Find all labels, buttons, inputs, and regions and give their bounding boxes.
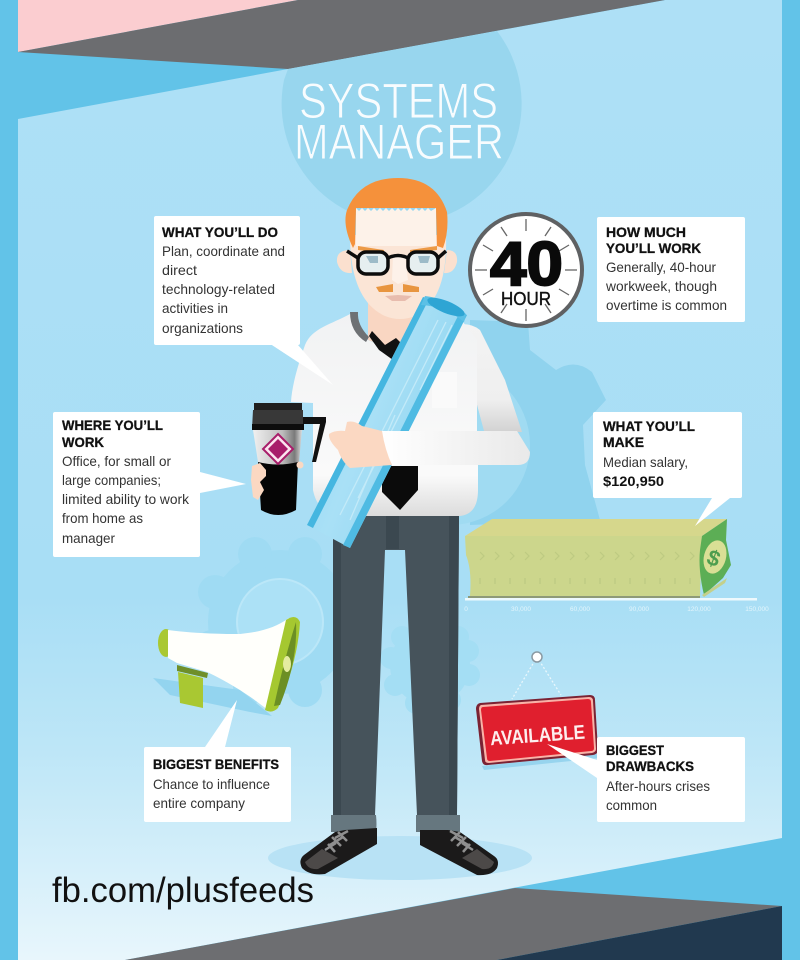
collar — [369, 331, 404, 360]
title circle — [282, 31, 522, 224]
hair — [345, 178, 448, 248]
eyebrows — [358, 246, 437, 253]
icon: available sign — [476, 652, 600, 770]
eyes — [366, 256, 430, 263]
callout: where you'll work: Office, for small or — [62, 453, 171, 469]
person — [291, 178, 530, 875]
rolled tube — [307, 294, 467, 548]
chart: money stack salary: 60,000 — [570, 606, 590, 613]
trouser cuffs — [331, 815, 460, 832]
title: SYSTEMS — [299, 73, 498, 129]
callout: biggest benefits: Chance to influence — [153, 776, 270, 792]
icon: megaphone — [153, 617, 300, 716]
icon: travel mug — [251, 403, 326, 515]
callout: what you'll make: $120,950 — [603, 473, 664, 489]
callout: how much you'll work: HOW MUCH — [606, 224, 686, 240]
callout: what you'll make — [593, 412, 742, 526]
lips — [385, 295, 412, 301]
shirt torso — [291, 313, 478, 516]
callout: biggest benefits — [144, 700, 291, 822]
tie — [382, 466, 418, 510]
chart: money stack salary: 90,000 — [629, 606, 649, 613]
pocket — [432, 372, 457, 408]
grey top band — [18, 0, 665, 69]
gears backdrop — [195, 320, 606, 714]
banknote end: $ — [704, 544, 724, 572]
callout: where you'll work: manager — [62, 530, 115, 546]
callout: what you'll make: WHAT YOU’LL — [603, 418, 695, 434]
callout: where you'll work: large companies; — [62, 472, 161, 488]
callout: how much you'll work: Generally, 40-hour — [606, 259, 716, 275]
upper arm — [455, 324, 522, 432]
callout: how much you'll work — [597, 217, 745, 322]
floor shadow — [268, 836, 532, 880]
trousers — [333, 516, 459, 815]
callout: biggest drawbacks: common — [606, 797, 657, 813]
forehead — [356, 208, 436, 246]
callout: what you'll do — [154, 216, 333, 385]
callout: biggest benefits: entire company — [153, 795, 245, 811]
watermark: fb.com/plusfeeds — [52, 871, 314, 910]
callout: biggest drawbacks: After-hours crises — [606, 778, 710, 794]
chart: money stack salary: 120,000 — [687, 606, 711, 613]
callout: what you'll do: activities in — [162, 300, 228, 316]
callout: what you'll do: technology-related — [162, 281, 275, 297]
clock icon: 40 — [490, 230, 563, 299]
chart: money stack salary — [464, 519, 769, 613]
chart: money stack salary: 30,000 — [511, 606, 531, 613]
bottom grey band — [125, 888, 782, 960]
pink corner shape — [18, 0, 298, 52]
callout: how much you'll work: YOU’LL WORK — [606, 240, 701, 256]
axis — [465, 598, 757, 600]
clock icon — [470, 214, 582, 326]
clock icon: HOUR — [501, 289, 551, 309]
callout: what you'll do: organizations — [162, 320, 243, 336]
bottom navy shape — [497, 906, 782, 960]
callout: biggest benefits: BIGGEST BENEFITS — [153, 756, 279, 772]
neck — [368, 300, 428, 352]
callout: where you'll work — [53, 412, 246, 557]
moustache — [376, 284, 419, 292]
icon: available sign: AVAILABLE — [489, 722, 586, 750]
nose — [392, 255, 408, 284]
callout: biggest drawbacks: DRAWBACKS — [606, 758, 694, 774]
glasses — [347, 251, 446, 274]
callout: how much you'll work: workweek, though — [605, 278, 717, 294]
right shoe — [420, 830, 498, 875]
callout: biggest drawbacks — [547, 737, 745, 822]
callout: where you'll work: limited ability to work — [62, 491, 190, 507]
banknote end — [700, 519, 731, 597]
title: MANAGER — [294, 114, 504, 170]
hand on tube — [329, 422, 392, 468]
right sleeve — [382, 431, 530, 465]
callout: where you'll work: WHERE YOU’LL — [62, 417, 163, 433]
callout: how much you'll work: overtime is common — [606, 297, 727, 313]
arm gap — [477, 405, 484, 431]
chart: money stack salary: 0 — [464, 606, 468, 613]
callout: what you'll do: Plan, coordinate and — [162, 243, 285, 259]
trouser shading — [333, 516, 459, 815]
callout: what you'll make: MAKE — [603, 434, 644, 450]
callout: what you'll do: direct — [162, 262, 197, 278]
callout: where you'll work: from home as — [62, 510, 143, 526]
callout: where you'll work: WORK — [62, 434, 104, 450]
callout: what you'll do: WHAT YOU’LL DO — [162, 224, 278, 240]
callout: what you'll make: Median salary, — [603, 454, 688, 470]
callout: biggest drawbacks: BIGGEST — [606, 742, 664, 758]
ears — [337, 250, 457, 273]
left shoe — [300, 828, 377, 874]
chart: money stack salary: 150,000 — [745, 606, 769, 613]
face — [350, 235, 446, 319]
title — [294, 73, 504, 170]
